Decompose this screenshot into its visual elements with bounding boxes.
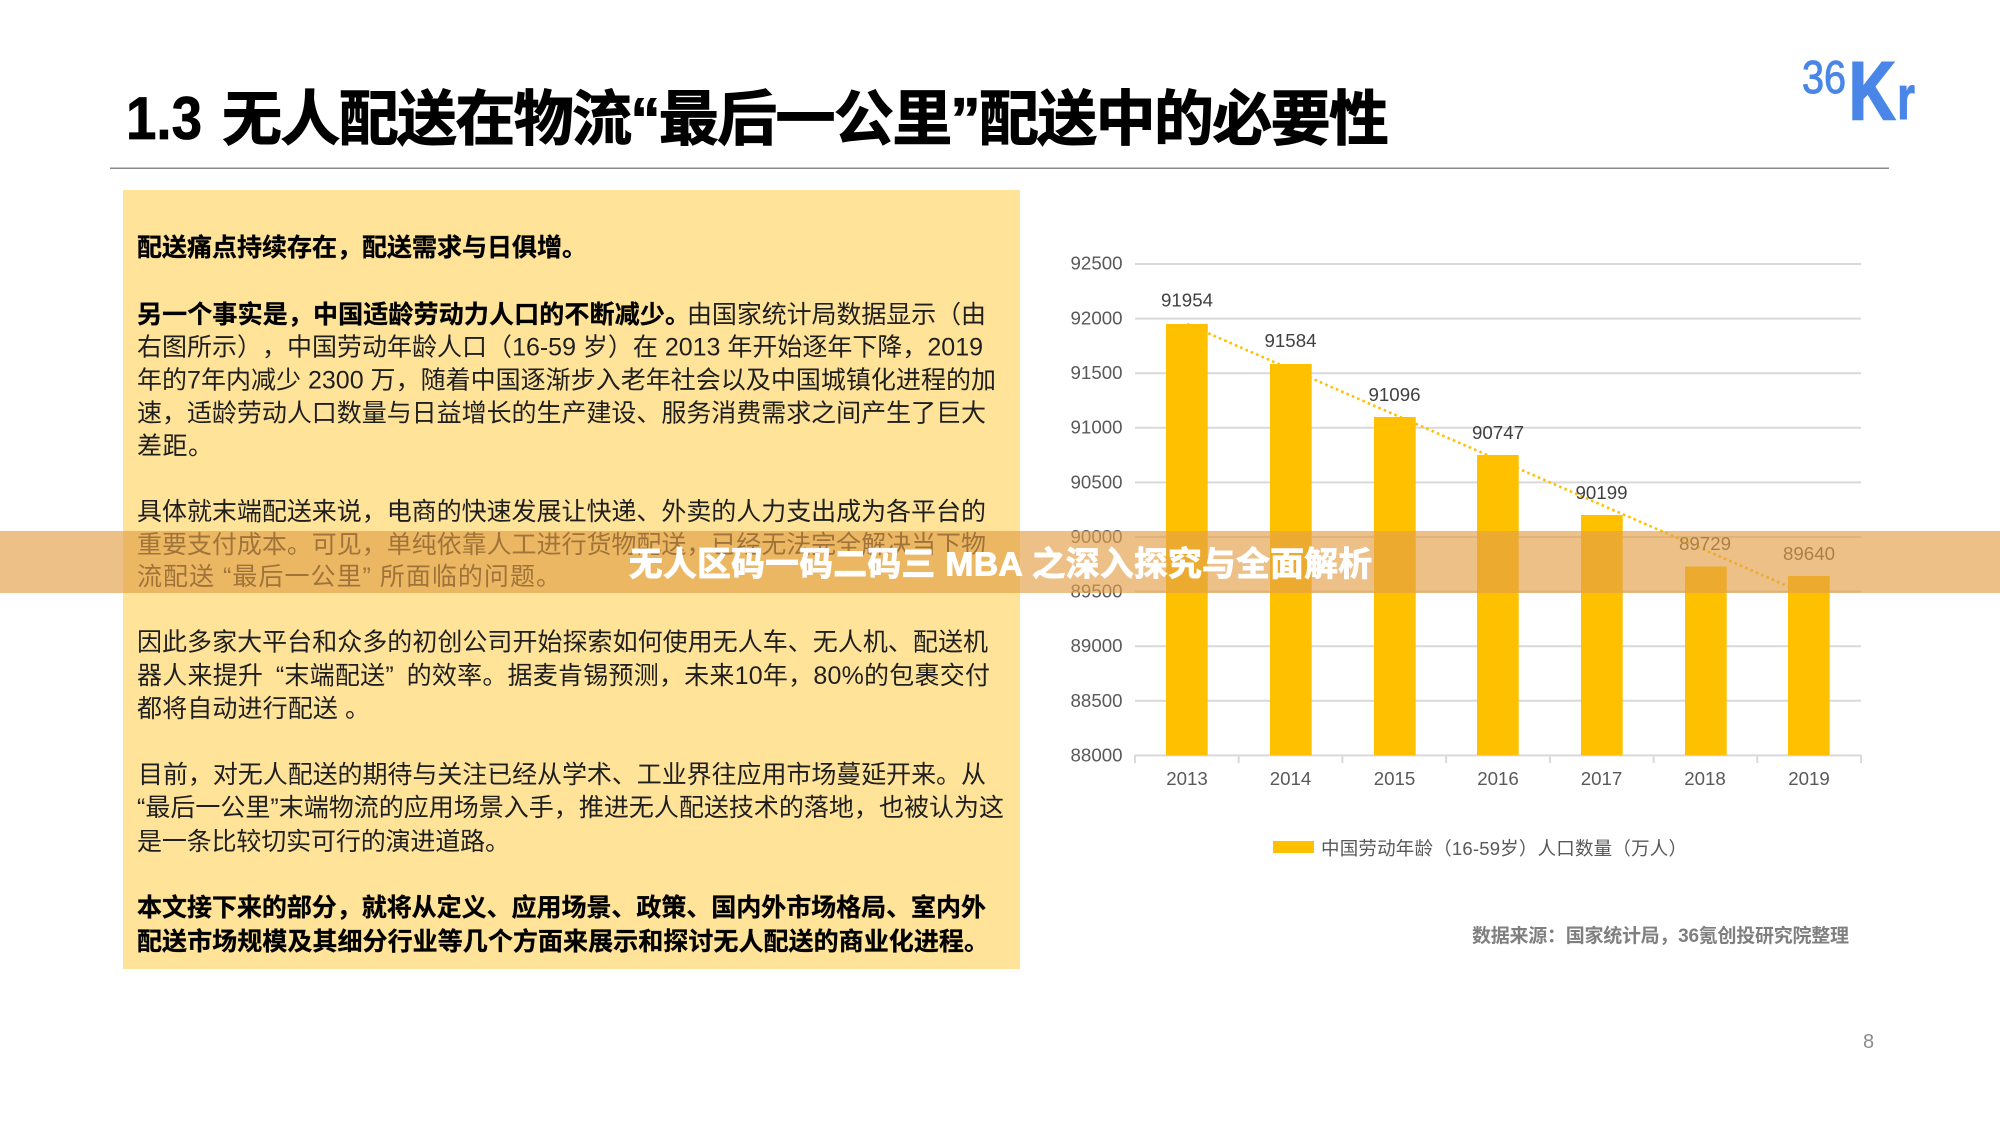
- paragraph: shrinking labour force: 右图所示），中国劳动年龄人口（16-59 岁）在 2013 年开始逐年下降，2019: [137, 334, 983, 362]
- y axis labels: 88500: [1071, 690, 1122, 711]
- x axis labels: 2017: [1581, 768, 1622, 789]
- y axis labels: 89000: [1071, 635, 1122, 656]
- y axis labels: 91500: [1071, 362, 1122, 383]
- x axis labels: 2019: [1788, 768, 1830, 789]
- paragraph: shrinking labour force: [137, 301, 996, 461]
- paragraph: platforms explore automation: 器人来提升 “末端配送” 的效率。据麦肯锡预测，未来10年，80%的包裹交付: [137, 662, 990, 690]
- title: 1.3: [126, 85, 202, 152]
- paragraph: last-mile labour cost: 具体就末端配送来说，电商的快速发展让快递、外卖的人力支出成为各平台的: [137, 498, 986, 526]
- source note: 数据来源：国家统计局，36氪创投研究院整理: [1472, 924, 1849, 947]
- paragraph: shrinking labour force: 差距。: [137, 433, 213, 461]
- paragraph: last-mile labour cost: 重要支付成本。可见，单纯依靠人工进行货物配送，已经无法完全解决当下物: [137, 531, 986, 559]
- paragraph: outline of the report: 本文接下来的部分，就将从定义、应用场景、政策、国内外市场格局、室内外: [137, 893, 986, 922]
- paragraph: platforms explore automation: [137, 629, 990, 723]
- y axis labels: 90500: [1071, 472, 1122, 492]
- data labels: 89729: [1679, 533, 1731, 554]
- y axis labels: 91000: [1071, 416, 1122, 438]
- paragraph: platforms explore automation: 因此多家大平台和众多的初创公司开始探索如何使用无人车、无人机、配送机: [137, 629, 988, 657]
- paragraph: academic and industry attention: [137, 761, 1004, 856]
- logo: 36Kr: K: [1849, 46, 1895, 137]
- logo: 36Kr: [1802, 46, 1915, 137]
- data labels: 91954: [1161, 290, 1213, 310]
- paragraph: shrinking labour force: 由国家统计局数据显示（由: [687, 301, 986, 329]
- banner overlay: [0, 531, 2000, 593]
- x axis labels: 2018: [1684, 768, 1726, 789]
- paragraph: last-mile labour cost: 流配送 “最后一公里” 所面临的问题。: [137, 563, 561, 591]
- data labels: [1161, 290, 1835, 564]
- paragraph: shrinking labour force: 速，适龄劳动人口数量与日益增长的生产建设、服务消费需求之间产生了巨大: [137, 400, 986, 428]
- logo: 36Kr: 36: [1802, 51, 1846, 103]
- y axis labels: 90000: [1071, 526, 1122, 547]
- legend: 中国劳动年龄（16-59岁）人口数量（万人）: [1321, 838, 1687, 859]
- title: 无人配送在物流“最后一公里”配送中的必要性: [222, 86, 1389, 153]
- paragraph: academic and industry attention: 是一条比较切实可行的演进道路。: [137, 828, 510, 856]
- paragraph: shrinking labour force: 年的7年内减少 2300 万，随着中国逐渐步入老年社会以及中国城镇化进程的加: [137, 367, 996, 395]
- x axis labels: 2013: [1166, 768, 1208, 789]
- data labels: 89640: [1783, 543, 1835, 564]
- x axis labels: 2014: [1270, 768, 1311, 789]
- logo: 36Kr: r: [1897, 64, 1915, 133]
- y axis labels: 88000: [1071, 744, 1122, 766]
- x axis labels: 2016: [1477, 768, 1519, 789]
- x axis labels: [1166, 768, 1830, 789]
- paragraph: academic and industry attention: “最后一公里”末端物流的应用场景入手，推进无人配送技术的落地，也被认为这: [137, 794, 1004, 822]
- paragraph: last-mile labour cost: [137, 498, 986, 591]
- y axis labels: 92500: [1071, 252, 1122, 274]
- paragraph: academic and industry attention: 目前，对无人配送的期待与关注已经从学术、工业界往应用市场蔓延开来。从: [138, 761, 986, 789]
- bar chart: working-age population: [1071, 252, 1861, 789]
- panel: text explanation: [123, 190, 1020, 969]
- bars: [1166, 324, 1830, 755]
- data labels: 91584: [1265, 330, 1316, 351]
- paragraph: platforms explore automation: 都将自动进行配送 。: [137, 695, 370, 723]
- x axis labels: 2015: [1374, 768, 1415, 789]
- data labels: 90199: [1576, 482, 1627, 503]
- y axis labels: 92000: [1071, 308, 1122, 328]
- paragraph: outline of the report: [137, 893, 989, 956]
- y axis labels: [1071, 252, 1122, 766]
- data labels: 91096: [1369, 384, 1420, 405]
- paragraph: outline of the report: 配送市场规模及其细分行业等几个方面来展示和探讨无人配送的商业化进程。: [137, 927, 989, 956]
- page number: 8: [1863, 1031, 1874, 1053]
- trend line: [1187, 324, 1808, 595]
- y axis labels: 89500: [1071, 580, 1122, 602]
- heading: delivery pain points: 配送痛点持续存在，配送需求与日俱增。: [137, 234, 587, 262]
- paragraph: shrinking labour force: 另一个事实是，中国适龄劳动力人口的不断减少。: [137, 301, 690, 329]
- data labels: 90747: [1472, 422, 1524, 443]
- banner title: 无人区码一码二码三 MBA 之深入探究与全面解析: [629, 546, 1372, 584]
